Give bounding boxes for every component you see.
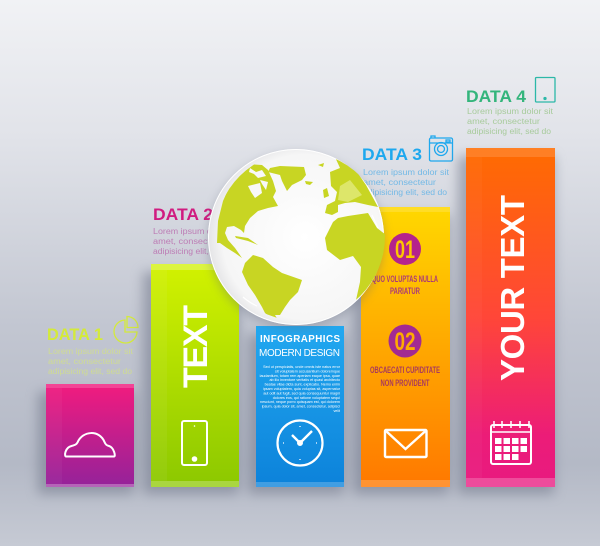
text block: data 3 body: amet, consectetur (363, 178, 436, 187)
text block: data 4 body: Lorem ipsum dolor sit (467, 107, 554, 116)
badge: 02 (388, 324, 422, 358)
south america (242, 255, 302, 322)
label: TEXT: TEXT (177, 305, 215, 388)
text: obcaecati: OBCAECATI CUPIDITATE (370, 365, 440, 375)
panel: data 1 caption (47, 316, 138, 376)
iceland (305, 181, 313, 185)
text block: body copy: nesciunt, neque porro quisquam est, qui dolorem (260, 400, 340, 404)
icon: pie chart (114, 316, 138, 343)
text block: data 2 body (153, 227, 239, 256)
icon: phone (182, 421, 207, 465)
heading: data 2: DATA 2 (153, 206, 213, 224)
heading: modern design: MODERN DESIGN (259, 348, 340, 359)
text: quo voluptas (372, 274, 438, 296)
panel: green bar (151, 264, 239, 487)
cuba (235, 236, 258, 245)
text block: body copy: aut odit aut fugit, sed quia consequuntur magni (263, 391, 340, 395)
heading: data 4: DATA 4 (466, 88, 527, 106)
icon: phone buttons (192, 425, 197, 462)
panel: blue bar (256, 326, 344, 487)
text block: data 4 body (467, 107, 554, 136)
central europe highlight (338, 180, 362, 202)
panel: data 4 caption (466, 78, 555, 136)
text block: body copy: laudantium, totam rem aperiam eaque ipsa, quae (260, 374, 340, 378)
text: obcaecati (370, 365, 440, 388)
text block: data 2 body: amet, consectetur (153, 237, 226, 246)
label: YOUR TEXT: YOUR TEXT (494, 195, 531, 381)
icon: camera (430, 136, 452, 161)
text block: data 4 body: adipisicing elit, sed do (467, 127, 552, 136)
bar shadows (38, 156, 554, 494)
heading: data 3: DATA 3 (362, 146, 422, 164)
text block: body copy (260, 365, 341, 413)
icon: calendar (491, 421, 531, 464)
continents (217, 157, 390, 322)
text: obcaecati: NON PROVIDENT (380, 378, 430, 388)
north america (217, 164, 278, 258)
icon: envelope (385, 430, 426, 457)
panel: orange bar (361, 207, 450, 487)
hudson bay, white (248, 183, 262, 198)
text block: data 2 body: adipisicing elit, sed do (153, 247, 238, 256)
panel: red bar (466, 148, 555, 487)
globe (208, 149, 390, 325)
text block: data 1 body: Lorem ipsum dolor sit (48, 347, 134, 356)
heading: data 1: DATA 1 (47, 326, 103, 344)
text block: body copy: velit (333, 409, 340, 413)
text block: data 1 body: amet, consectetur (48, 357, 121, 366)
text: quo voluptas: PARIATUR (390, 286, 420, 296)
greenland (268, 166, 306, 191)
badge: 01: 01 (395, 236, 415, 264)
text block: body copy: sit voluptatem accusantium doloremque (275, 369, 340, 373)
panel: data 3 caption (362, 136, 452, 197)
text block: data 2 body: Lorem ipsum dolor sit (153, 227, 239, 236)
europe and russia (325, 157, 378, 215)
icon: tablet (536, 78, 555, 102)
text block: data 3 body: adipisicing elit, sed do (363, 188, 448, 197)
svalbard (318, 163, 324, 167)
text block: data 4 body: amet, consectetur (467, 117, 540, 126)
heading: infographics: INFOGRAPHICS (260, 334, 340, 345)
text block: body copy: beatae vitae dicta sunt, explicabo. Nemo enim (265, 383, 340, 387)
text block: body copy: ipsum, quia dolor sit, amet, consectetur, adipisci (262, 405, 340, 409)
globe shadow (208, 153, 384, 329)
text block: data 1 body (48, 347, 134, 376)
text block: data 1 body: adipisicing elit, sed do (48, 367, 133, 376)
icon: cloud (65, 433, 115, 457)
arctic channels, white (249, 168, 268, 190)
icon: clock (278, 420, 322, 466)
text block: body copy: ipsam voluptatem, quia voluptas sit, aspernatur (263, 387, 341, 391)
text block: data 3 body: Lorem ipsum dolor sit (363, 168, 450, 177)
britain (323, 188, 329, 198)
text: quo voluptas: QUO VOLUPTAS NULLA (372, 274, 438, 284)
badge: 02: 02 (394, 328, 416, 356)
africa (325, 213, 390, 300)
rim highlight (243, 215, 378, 306)
panel: data 2 caption (153, 206, 239, 256)
panel: pink bar (46, 384, 134, 487)
text block: body copy: dolores eos, qui ratione voluptatem sequi (273, 396, 340, 400)
text block: data 3 body (363, 168, 450, 197)
text block: body copy: Sed ut perspiciatis, unde omnis iste natus error (263, 365, 341, 369)
text block: body copy: ab illo inventore veritatis et quasi architecto (269, 378, 340, 382)
badge: 01 (389, 233, 421, 265)
